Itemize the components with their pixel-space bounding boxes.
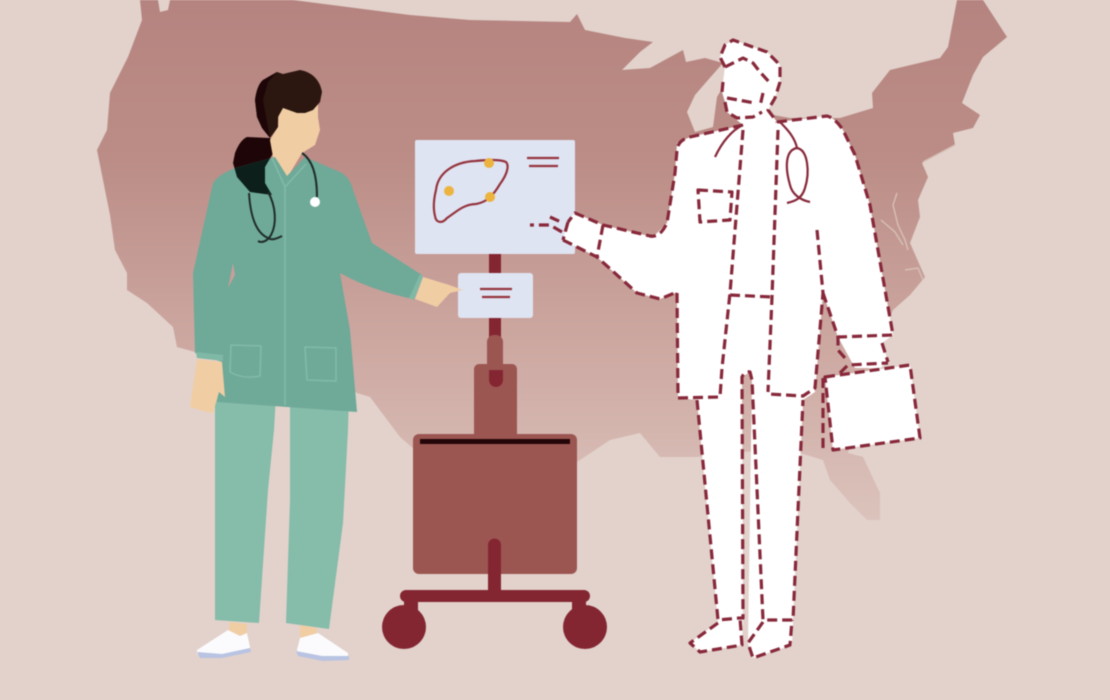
ponytail — [233, 137, 275, 195]
briefcase — [825, 365, 920, 450]
coat — [193, 157, 422, 412]
screen text lines — [527, 158, 559, 166]
coat centre lines — [720, 130, 743, 397]
coat outer — [777, 116, 893, 337]
liver markers — [444, 158, 495, 202]
stethoscope outline — [715, 122, 810, 203]
hand left — [190, 359, 225, 413]
monitor cart — [382, 250, 607, 649]
stethoscope — [249, 153, 317, 242]
neck and face — [270, 104, 320, 178]
shoes — [690, 618, 742, 652]
hand fingers — [530, 217, 563, 232]
pole base — [474, 364, 517, 446]
dashed outline doctor — [530, 40, 920, 658]
head — [720, 40, 780, 122]
hand pointing — [415, 277, 463, 307]
map of the United States — [97, 0, 1007, 520]
hair shadow — [255, 72, 277, 138]
pants — [215, 395, 349, 629]
telescoping collar — [487, 335, 503, 385]
woman's fingertip over panel — [446, 284, 463, 292]
white figure fill — [563, 40, 893, 658]
pole tip — [489, 370, 503, 387]
cart slot — [420, 439, 570, 444]
chest pocket — [698, 190, 732, 222]
legs — [697, 372, 803, 620]
woman doctor — [190, 70, 463, 661]
liver outline — [434, 160, 508, 222]
illustration — [96, 0, 1008, 662]
cart stem — [488, 538, 501, 592]
left wheel — [382, 596, 426, 649]
coat cuffs — [196, 274, 423, 361]
cart base bar — [400, 590, 590, 602]
ankles — [228, 622, 317, 640]
stethoscope chestpiece — [310, 197, 320, 207]
lake and bay details — [881, 145, 955, 280]
ponytail over coat — [234, 158, 272, 196]
shoes — [197, 630, 349, 661]
collar, placket and pockets — [230, 158, 336, 405]
upper pole — [489, 250, 501, 380]
right wheel — [563, 596, 607, 649]
small control panel — [458, 273, 533, 318]
hair — [255, 70, 322, 138]
cart body — [413, 434, 577, 574]
coat gap under arm — [228, 263, 235, 288]
main monitor screen — [415, 140, 575, 254]
